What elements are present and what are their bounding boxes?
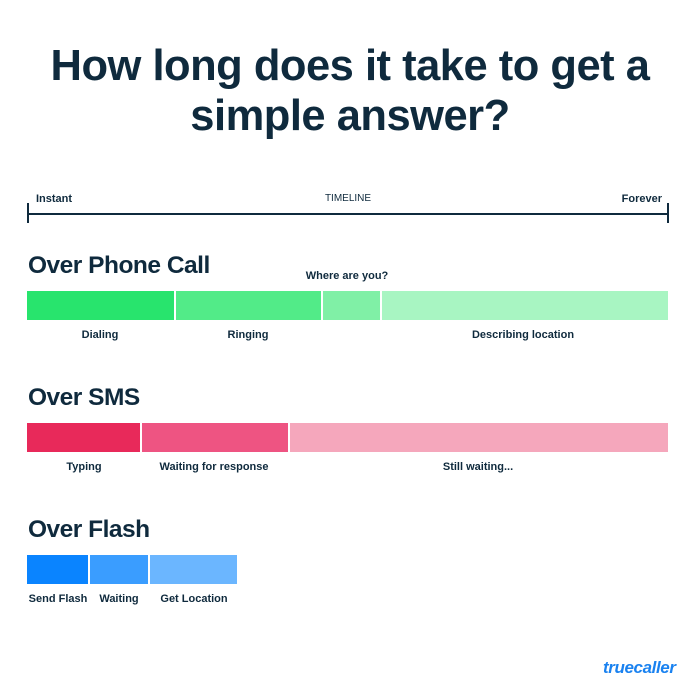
- heading: phone call: Over Phone Call: [28, 252, 210, 279]
- SMS labels: Waiting for response: [160, 461, 268, 473]
- SMS labels: [66, 461, 513, 473]
- timeline: Instant: [36, 193, 72, 205]
- Flash labels: Get Location: [160, 593, 228, 605]
- SMS labels: Still waiting...: [443, 461, 513, 473]
- Flash labels: Waiting: [99, 593, 139, 605]
- timeline: [27, 193, 669, 223]
- heading: Flash: Over Flash: [28, 516, 150, 543]
- phone labels: Ringing: [228, 329, 268, 341]
- bar: Flash: [27, 555, 237, 584]
- phone labels: Dialing: [82, 329, 118, 341]
- title: simple answer?: [190, 92, 510, 140]
- timeline: TIMELINE: [325, 193, 371, 204]
- Flash labels: [29, 593, 228, 605]
- bar: phone call: [27, 291, 668, 320]
- bar: SMS: [27, 423, 668, 452]
- logo: truecaller: truecaller: [603, 658, 676, 677]
- Flash labels: Send Flash: [29, 593, 87, 605]
- SMS labels: Typing: [66, 461, 102, 473]
- timeline: Forever: [622, 193, 662, 205]
- title: [51, 42, 650, 140]
- heading: SMS: Over SMS: [28, 384, 140, 411]
- title: How long does it take to get a: [51, 42, 649, 90]
- phone labels: [82, 329, 574, 341]
- phone labels: Describing location: [472, 329, 574, 341]
- label: where are you: Where are you?: [306, 270, 388, 282]
